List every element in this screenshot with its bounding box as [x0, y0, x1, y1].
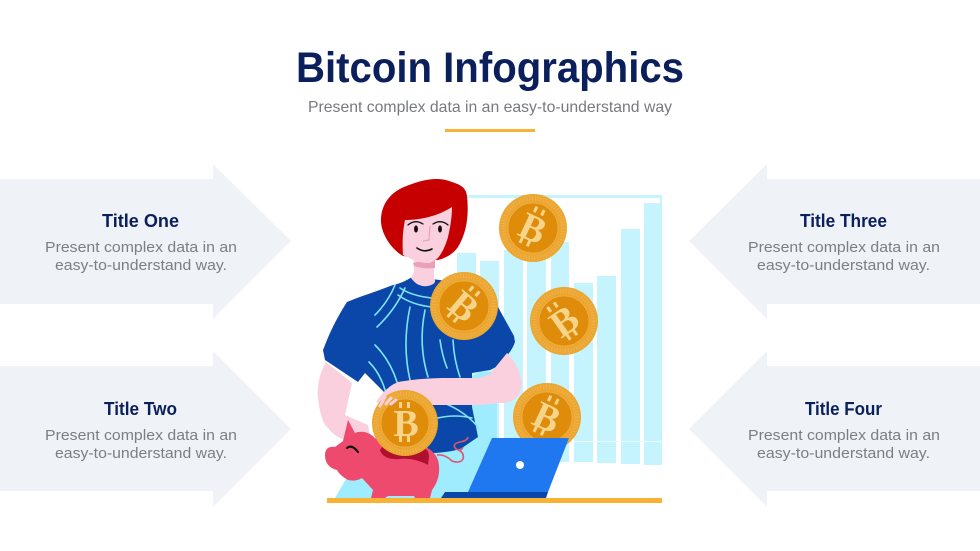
person [318, 179, 522, 453]
title underline [445, 129, 535, 132]
coin 3 [530, 287, 598, 355]
panel: title two arrow: Present complex data in an [45, 427, 237, 444]
subtitle: Present complex data in an easy-to-understand way [308, 99, 672, 116]
right arm [376, 353, 522, 408]
coin 4 in hand: B [393, 403, 419, 445]
laptop [441, 438, 569, 498]
panel: title four arrow: easy-to-understand way. [757, 445, 930, 462]
desk line [327, 498, 662, 503]
panel: title four arrow: Present complex data in an [748, 427, 940, 444]
panel: title two arrow: Title Two [104, 399, 177, 419]
title: Bitcoin Infographics [296, 44, 684, 92]
shirt [323, 277, 515, 453]
fingers over coin [380, 397, 396, 406]
panel: title three arrow: easy-to-understand way. [757, 257, 930, 274]
panel: title two arrow [0, 351, 291, 507]
piggy bank [325, 420, 468, 498]
shirt lines [369, 285, 478, 427]
coin 5 [513, 383, 581, 451]
face [403, 207, 452, 263]
floor shape [335, 372, 497, 498]
coin 2: B [440, 283, 487, 331]
panel: title four arrow: Title Four [805, 399, 882, 419]
bar chart backdrop [440, 195, 662, 465]
hair back [381, 179, 468, 260]
coin 3: B [542, 297, 587, 346]
panel: title one arrow: Title One [102, 211, 179, 231]
panel: title two arrow: easy-to-understand way. [55, 445, 227, 462]
coin 1: B [512, 205, 553, 253]
panel: title three arrow [689, 164, 980, 319]
coin 5: B [526, 394, 567, 442]
panel: title one arrow: easy-to-understand way. [55, 257, 227, 274]
coin 1 [499, 194, 567, 262]
face features [408, 222, 448, 251]
coin 4 in hand [372, 390, 438, 456]
neck [411, 258, 435, 286]
panel: title one arrow [0, 164, 291, 319]
panel: title three arrow: Title Three [800, 211, 887, 231]
left arm [318, 362, 372, 446]
panel: title one arrow: Present complex data in an [45, 239, 237, 256]
panel: title four arrow [689, 351, 980, 507]
coin 2 [430, 272, 498, 340]
panel: title three arrow: Present complex data in an [748, 239, 940, 256]
